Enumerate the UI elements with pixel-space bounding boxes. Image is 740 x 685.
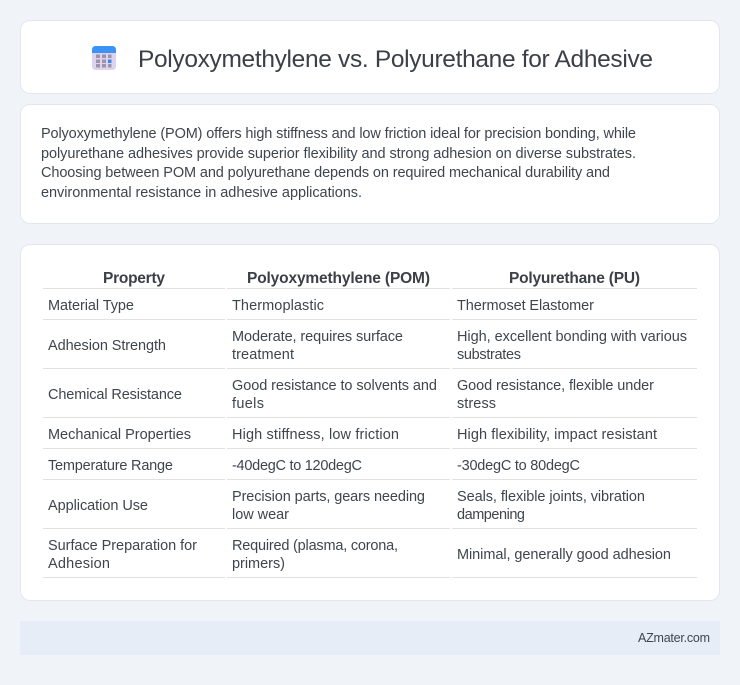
table row: application use: Application Use [48,498,148,514]
panel: footer band [20,621,720,655]
intro text: Polyoxymethylene (POM) offers high stiffness and low friction ideal for precision bonding, while [41,126,636,142]
title: Polyoxymethylene vs. Polyurethane for Adhesive [138,46,653,73]
table row: mechanical properties: Mechanical Properties [48,427,191,443]
table row: surface preparation [48,538,671,572]
icon: calendar [92,46,116,70]
table row: mechanical properties [48,427,657,443]
table row: material type: Thermoset Elastomer [457,298,594,314]
table row: adhesion strength: Moderate, requires surface [232,329,403,345]
table row: mechanical properties: High flexibility, impact resistant [457,427,657,443]
table row: temperature range: -30degC to 80degC [457,458,580,474]
table row: adhesion strength: substrates [457,347,521,363]
table row: application use: Precision parts, gears needing [232,489,425,505]
table row: chemical resistance: fuels [232,396,264,412]
table row: material type [48,298,594,314]
table row: application use [48,489,645,523]
footer credit: AZmater.com [638,631,710,645]
intro text: polyurethane adhesives provide superior flexibility and strong adhesion on diverse substrates. [41,146,636,162]
table row: application use: Seals, flexible joints, vibration [457,489,645,505]
table header: Polyurethane (PU) [509,270,640,287]
table row: surface preparation: Required (plasma, corona, [232,538,398,554]
table row: application use: dampening [457,507,525,523]
table row: adhesion strength: Adhesion Strength [48,338,166,354]
table row: chemical resistance [48,378,654,412]
panel: table card [20,244,720,601]
table row: chemical resistance: Chemical Resistance [48,387,182,403]
table row: temperature range: -40degC to 120degC [232,458,362,474]
table row: adhesion strength [48,329,687,363]
table header: Polyoxymethylene (POM) [247,270,430,287]
panel: intro card [20,104,720,224]
table row: surface preparation: Surface Preparation for [48,538,197,554]
table row: material type: Thermoplastic [232,298,324,314]
table row: temperature range [48,458,580,474]
table row: chemical resistance: Good resistance to solvents and [232,378,437,394]
intro text [41,126,636,201]
panel: title card [20,20,720,94]
table row: surface preparation: Minimal, generally good adhesion [457,547,671,563]
table row: surface preparation: primers) [232,556,285,572]
table header [103,270,640,287]
table row: surface preparation: Adhesion [48,556,110,572]
table row: mechanical properties: High stiffness, low friction [232,427,399,443]
table row: material type: Material Type [48,298,134,314]
table row: application use: low wear [232,507,289,523]
intro text: environmental resistance in adhesive applications. [41,185,362,201]
table row: adhesion strength: High, excellent bonding with various [457,329,687,345]
table row: adhesion strength: treatment [232,347,294,363]
table row: chemical resistance: Good resistance, flexible under [457,378,654,394]
table row: chemical resistance: stress [457,396,496,412]
table header: Property [103,270,165,287]
intro text: Choosing between POM and polyurethane depends on required mechanical durability and [41,165,610,181]
table grid lines [43,288,697,578]
table row: temperature range: Temperature Range [48,458,173,474]
